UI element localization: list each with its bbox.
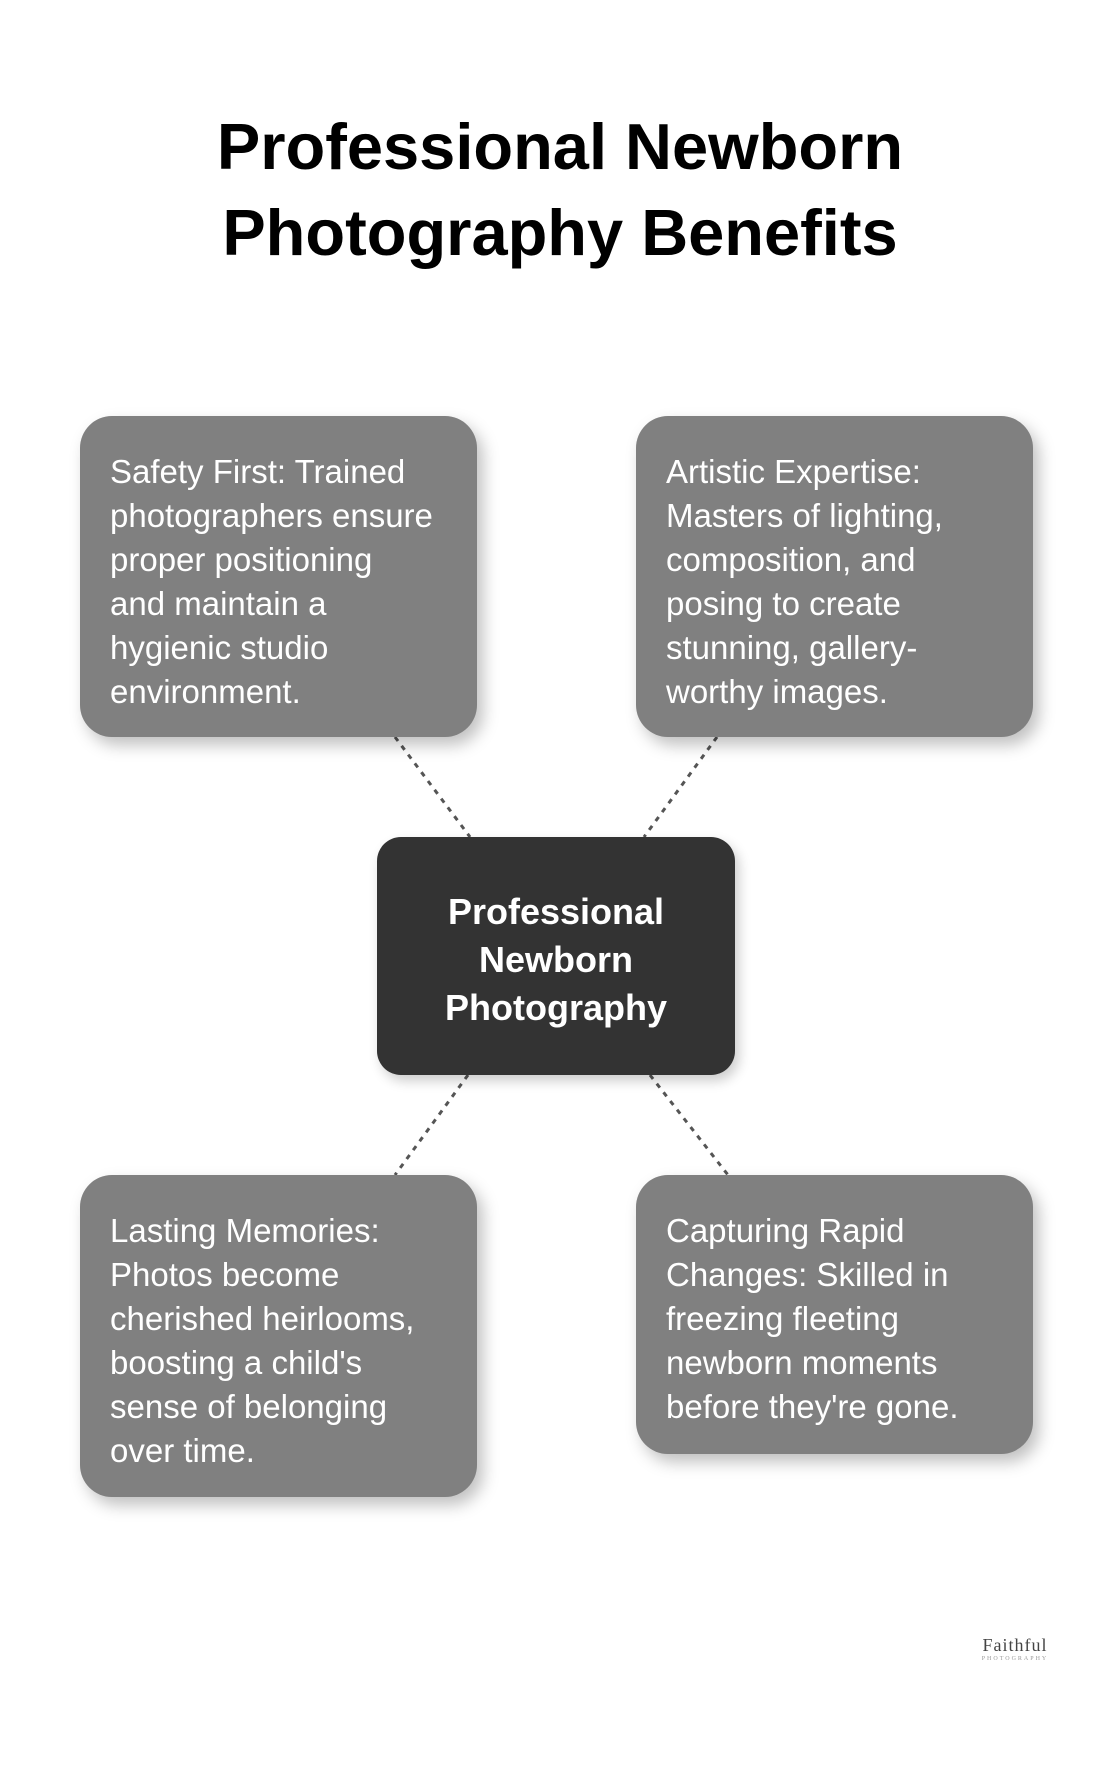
panel: capturing rapid changes: newborn moments xyxy=(666,1344,937,1381)
title xyxy=(217,110,903,269)
panel: artistic expertise xyxy=(636,416,1033,737)
title: Professional Newborn xyxy=(217,110,903,183)
panel: lasting memories: Photos become xyxy=(110,1256,339,1293)
center node: Newborn xyxy=(479,939,633,980)
panel: safety first: environment. xyxy=(110,673,301,710)
center node: Photography xyxy=(445,987,667,1028)
center node xyxy=(377,837,735,1075)
panel: capturing rapid changes: freezing fleeting xyxy=(666,1300,899,1337)
panel: lasting memories: over time. xyxy=(110,1432,255,1469)
panel: capturing rapid changes: before they're gone. xyxy=(666,1388,959,1425)
panel: safety first: and maintain a xyxy=(110,585,326,622)
logo: Faithful xyxy=(982,1635,1048,1655)
panel: safety first: proper positioning xyxy=(110,541,372,578)
panel: safety first: hygienic studio xyxy=(110,629,328,666)
panel: lasting memories: boosting a child's xyxy=(110,1344,362,1381)
panel: safety first: photographers ensure xyxy=(110,497,433,534)
panel: artistic expertise: worthy images. xyxy=(666,673,888,710)
panel: safety first xyxy=(80,416,477,737)
panel: capturing rapid changes: Capturing Rapid xyxy=(666,1212,904,1249)
panel: artistic expertise: Masters of lighting, xyxy=(666,497,943,534)
title: Photography Benefits xyxy=(222,196,898,269)
panel: artistic expertise: Artistic Expertise: xyxy=(666,453,921,490)
panel: artistic expertise: stunning, gallery- xyxy=(666,629,917,666)
panel: safety first: Safety First: Trained xyxy=(110,453,405,490)
panel: capturing rapid changes: Changes: Skilled in xyxy=(666,1256,948,1293)
panel: artistic expertise: posing to create xyxy=(666,585,901,622)
logo: PHOTOGRAPHY xyxy=(982,1656,1048,1662)
center node: Professional xyxy=(448,891,664,932)
panel: lasting memories: sense of belonging xyxy=(110,1388,387,1425)
panel: capturing rapid changes xyxy=(636,1175,1033,1454)
panel: lasting memories: cherished heirlooms, xyxy=(110,1300,414,1337)
panel: artistic expertise: composition, and xyxy=(666,541,915,578)
panel: lasting memories: Lasting Memories: xyxy=(110,1212,380,1249)
panel: lasting memories xyxy=(80,1175,477,1497)
